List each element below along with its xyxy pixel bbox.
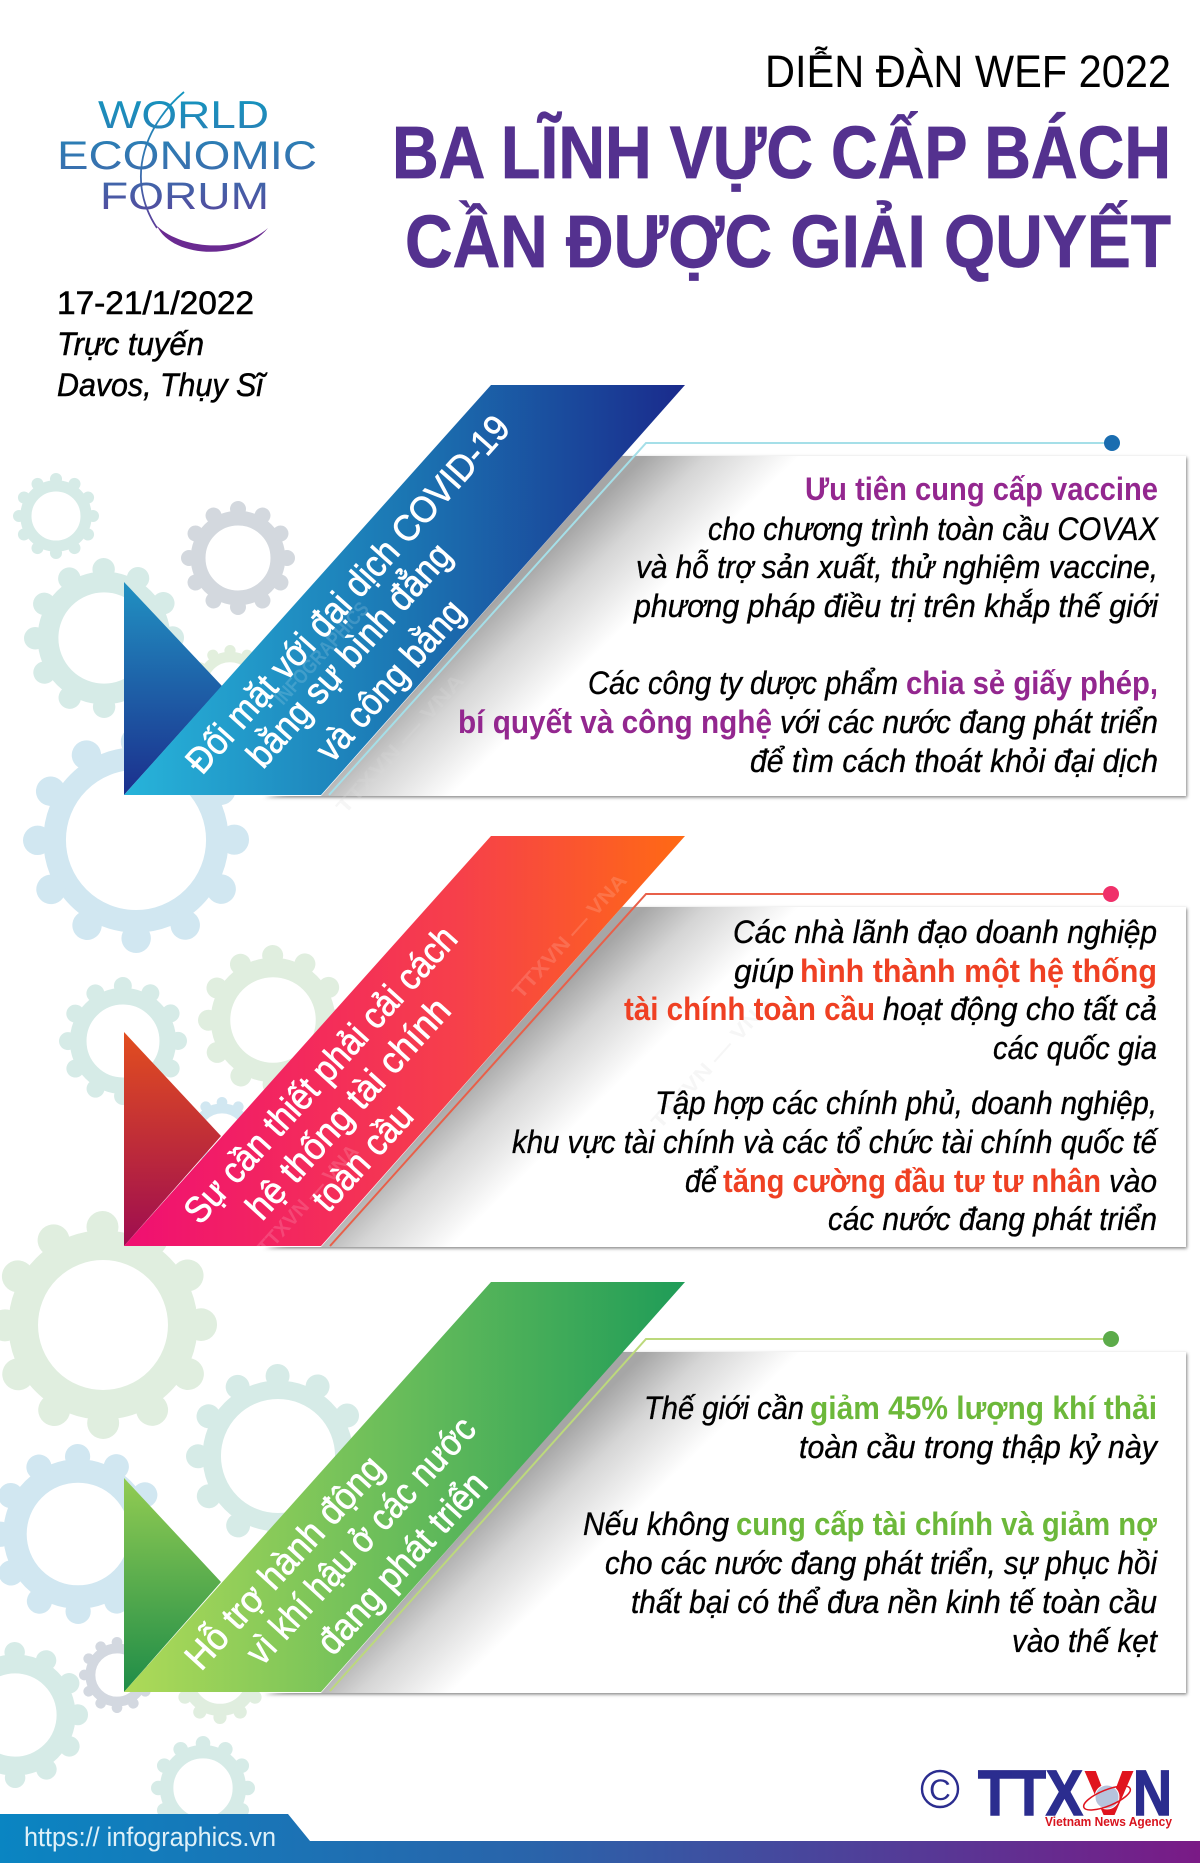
ribbon 2 (124, 836, 685, 1246)
panel text 2: tài chính toàn cầu (624, 991, 875, 1027)
panel text 1: cho chương trình toàn cầu COVAX (708, 511, 1160, 547)
panel text 3: giảm 45% lượng khí thải (810, 1390, 1157, 1426)
panel text 2: để (685, 1163, 719, 1199)
watermark 2 (253, 870, 777, 1259)
ribbon heading 2: Sự cần thiết phải cải cách (176, 918, 465, 1231)
logo: World Economic Forum: WORLD (98, 94, 269, 137)
triangle 3 (124, 1478, 221, 1692)
panel text 2: Tập hợp các chính phủ, doanh nghiệp, (655, 1085, 1157, 1121)
event date and place: Davos, Thụy Sĩ (57, 367, 268, 403)
panel text 1: bí quyết và công nghệ (458, 704, 772, 740)
ribbon 3 (124, 1282, 685, 1692)
title: DIỄN ĐÀN WEF 2022 (765, 46, 1171, 97)
panel text 1: Ưu tiên cung cấp vaccine (805, 471, 1158, 507)
panel 1 (263, 456, 1186, 796)
triangle 1 (124, 582, 222, 795)
panel text 2: hoạt động cho tất cả (883, 991, 1157, 1027)
logo: TTXVN Vietnam News Agency: Vietnam News Agency (1045, 1815, 1172, 1829)
panel text 3: thất bại có thể đưa nền kinh tế toàn cầu (631, 1584, 1157, 1620)
panel text 2: hình thành một hệ thống (800, 953, 1157, 989)
connector line 2 (330, 886, 1119, 1246)
ribbon heading 3: đang phát triển (309, 1463, 495, 1662)
logo: TTXVN Vietnam News Agency: N (1133, 1757, 1172, 1829)
panel text 2: khu vực tài chính và các tổ chức tài chính quốc tế (512, 1124, 1159, 1160)
panel text 3: toàn cầu trong thập kỷ này (799, 1429, 1159, 1465)
panel text 1 (458, 471, 1160, 779)
background gears (0, 479, 358, 1833)
panel text 1: chia sẻ giấy phép, (906, 665, 1158, 701)
connector line 1 (329, 435, 1120, 795)
watermark 2: TTXVN — VNA (647, 992, 777, 1133)
logo: World Economic Forum: FORUM (100, 176, 269, 218)
watermark 1: TTXVN — VNA (332, 670, 469, 818)
triangle 2 (124, 1032, 221, 1246)
ribbon heading 3: Hỗ trợ hành động (177, 1447, 392, 1677)
title (392, 46, 1171, 283)
logo: TTXVN Vietnam News Agency: TTX (978, 1757, 1083, 1829)
event date and place: Trực tuyến (57, 326, 204, 362)
panel 3 (263, 1352, 1186, 1693)
panel text 2: giúp (734, 953, 794, 989)
panel text 3: cho các nước đang phát triển, sự phục hồi (605, 1545, 1158, 1581)
ribbon heading 3 (177, 1408, 495, 1677)
copyright symbol (922, 1771, 958, 1807)
section 2: global finance (124, 836, 1186, 1259)
panel text 3: vào thế kẹt (1012, 1623, 1158, 1659)
footer bar (0, 1814, 1200, 1863)
logo: World Economic Forum (57, 92, 317, 252)
footer url: https:// infographics.vn (24, 1822, 276, 1852)
watermark 2: TTXVN — VNA (508, 870, 632, 1003)
panel text 1: và hỗ trợ sản xuất, thử nghiệm vaccine, (636, 549, 1158, 585)
watermark 1 (270, 598, 469, 818)
panel text 2: tăng cường đầu tư tư nhân (723, 1163, 1101, 1199)
panel 2 (263, 907, 1186, 1247)
panel text 1: phương pháp điều trị trên khắp thế giới (633, 588, 1159, 624)
ribbon 1 (124, 385, 685, 795)
panel text 2: vào (1109, 1163, 1157, 1199)
panel text 3 (583, 1390, 1159, 1659)
watermark 1: INFOGRAPHICS (270, 598, 374, 709)
ribbon heading 2: hệ thống tài chính (238, 989, 459, 1227)
panel text 3: Nếu không (583, 1506, 729, 1542)
panel text 2: các quốc gia (993, 1030, 1157, 1066)
connector line 3 (330, 1331, 1119, 1691)
logo: World Economic Forum: ECONOMIC (57, 134, 317, 178)
panel text 1: Các công ty dược phẩm (588, 665, 898, 701)
ribbon heading 3: vì khí hậu ở các nước (238, 1408, 484, 1672)
event date and place: 17-21/1/2022 (57, 285, 254, 321)
copyright symbol: C (929, 1774, 951, 1807)
event date and place (57, 285, 268, 403)
panel text 1: với các nước đang phát triển (780, 704, 1158, 740)
section 3: climate action (124, 1282, 1186, 1693)
panel text 2 (512, 914, 1159, 1237)
panel text 1: để tìm cách thoát khỏi đại dịch (750, 743, 1158, 779)
panel text 2: các nước đang phát triển (828, 1201, 1157, 1237)
panel text 3: Thế giới cần (644, 1390, 804, 1426)
ribbon heading 2: toàn cầu (304, 1096, 421, 1219)
logo: TTXVN Vietnam News Agency (978, 1757, 1172, 1829)
ribbon heading 1: Đối mặt với đại dịch COVID-19 (177, 407, 518, 781)
panel text 3: cung cấp tài chính và giảm nợ (736, 1506, 1157, 1542)
watermark 2: TTXVN — VNA (253, 1141, 363, 1259)
logo: TTXVN Vietnam News Agency: V (1084, 1757, 1134, 1829)
section 1: COVID-19 (124, 385, 1186, 818)
ribbon heading 1: bằng sự bình đẳng (238, 534, 460, 775)
panel text 2: Các nhà lãnh đạo doanh nghiệp (733, 914, 1157, 950)
ribbon heading 1: và công bằng (307, 591, 473, 769)
